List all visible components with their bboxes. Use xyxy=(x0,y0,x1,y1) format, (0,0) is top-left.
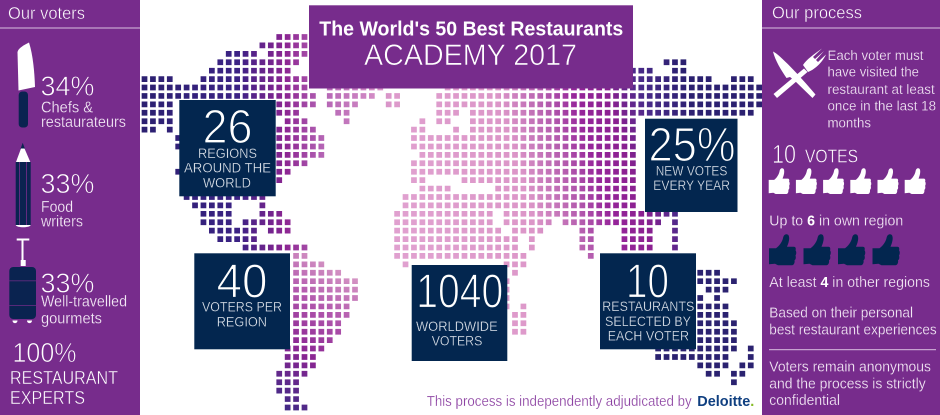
stat box: 25% new votes: 25% xyxy=(648,119,736,172)
heading: our voters: Our voters xyxy=(8,3,85,23)
text: anonymity: confidential xyxy=(769,393,840,409)
stat box: 10 restaurants: 10 xyxy=(626,256,669,309)
text: anonymity: and the process is strictly xyxy=(769,376,926,392)
stat box: 25% new votes xyxy=(645,119,738,212)
text: food writers xyxy=(40,168,94,231)
stat box: 40 voters: 40 xyxy=(216,256,268,309)
stat box: 25% new votes: EVERY YEAR xyxy=(653,177,730,193)
panel: our process xyxy=(762,0,940,415)
map: South America xyxy=(276,256,361,407)
text: food writers: Food xyxy=(41,199,73,216)
text: anonymity: Voters remain anonymous xyxy=(769,360,931,376)
stat box: 26 regions: REGIONS xyxy=(198,145,257,161)
text: food writers: 33% xyxy=(40,168,94,199)
text: personal experiences: Based on their personal xyxy=(769,306,913,322)
stat box: 1040 voters: 1040 xyxy=(416,266,503,319)
title banner xyxy=(309,5,633,88)
title line 2: ACADEMY 2017 xyxy=(364,39,577,72)
text: 10 votes: VOTES xyxy=(805,147,858,167)
stat box: 40 voters xyxy=(194,253,290,349)
text: at least 4 in other regions: At least 4 in other regions xyxy=(769,275,930,291)
icon: pencil xyxy=(16,143,31,227)
stat box: 1040 voters xyxy=(412,265,507,361)
stat box: 1040 voters: VOTERS xyxy=(432,333,482,349)
stat box: 10 restaurants: RESTAURANTS xyxy=(602,298,694,314)
stat box: 26 regions: WORLD xyxy=(203,174,251,190)
icon: four navy thumbs up xyxy=(769,234,900,265)
text: chefs: 34% xyxy=(40,70,94,101)
text: up to 6 in own region: Up to 6 in own region xyxy=(769,214,903,230)
dot world map xyxy=(142,37,765,407)
map: Europe, Africa and Asia xyxy=(394,62,765,332)
text: visit requirement: once in the last 18 xyxy=(828,99,936,115)
text: visit requirement xyxy=(828,48,936,131)
text: chefs: Chefs & xyxy=(41,100,93,117)
text: gourmets: 33% xyxy=(40,268,94,299)
stat box: 26 regions: AROUND THE xyxy=(184,160,271,176)
text: gourmets: gourmets xyxy=(41,310,102,327)
Deloitte wordmark: Deloitte. xyxy=(697,393,754,410)
stat box: 10 restaurants: EACH VOTER xyxy=(608,328,689,344)
title line 1: The World's 50 Best Restaurants xyxy=(319,18,623,41)
text: 100% restaurant experts xyxy=(10,337,118,408)
text: 100% restaurant experts: EXPERTS xyxy=(10,388,85,408)
icon: crossed knife and fork xyxy=(773,48,826,98)
text: 100% restaurant experts: RESTAURANT xyxy=(10,368,118,388)
stat box: 26 regions xyxy=(179,100,276,196)
text: 100% restaurant experts: 100% xyxy=(12,337,76,368)
text: chefs xyxy=(40,70,126,131)
text: visit requirement: restaurant at least xyxy=(828,82,935,98)
adjudication note: This process is independently adjudicated by xyxy=(427,394,692,410)
text: food writers: writers xyxy=(40,214,83,231)
text: chefs: restaurateurs xyxy=(41,114,126,131)
text: visit requirement: have visited the xyxy=(828,65,919,81)
stat box: 40 voters: VOTERS PER xyxy=(202,299,282,315)
stat box: 10 restaurants: SELECTED BY xyxy=(605,313,692,329)
stat box: 40 voters: REGION xyxy=(217,313,267,329)
panel: our voters xyxy=(0,0,140,415)
heading: our process: Our process xyxy=(772,2,862,22)
text: gourmets xyxy=(40,268,127,327)
text: visit requirement: months xyxy=(828,115,871,131)
map: South-East Asia and Australia xyxy=(655,273,756,382)
text: visit requirement: Each voter must xyxy=(828,48,924,64)
map: North America and Greenland xyxy=(142,37,403,248)
stat box: 25% new votes: NEW VOTES xyxy=(656,163,727,179)
stat box: 1040 voters: WORLDWIDE xyxy=(416,318,498,334)
stat box: 10 restaurants xyxy=(600,253,696,349)
stat box: 26 regions: 26 xyxy=(202,101,252,154)
icon: six white thumbs up xyxy=(769,168,926,194)
icon: knife xyxy=(18,42,35,128)
text: personal experiences xyxy=(769,306,937,338)
text: gourmets: Well-travelled xyxy=(41,294,127,311)
text: 10 votes xyxy=(772,139,858,169)
text: 10 votes: 10 xyxy=(772,139,796,169)
icon: suitcase xyxy=(9,238,36,323)
text: anonymity xyxy=(769,360,931,409)
